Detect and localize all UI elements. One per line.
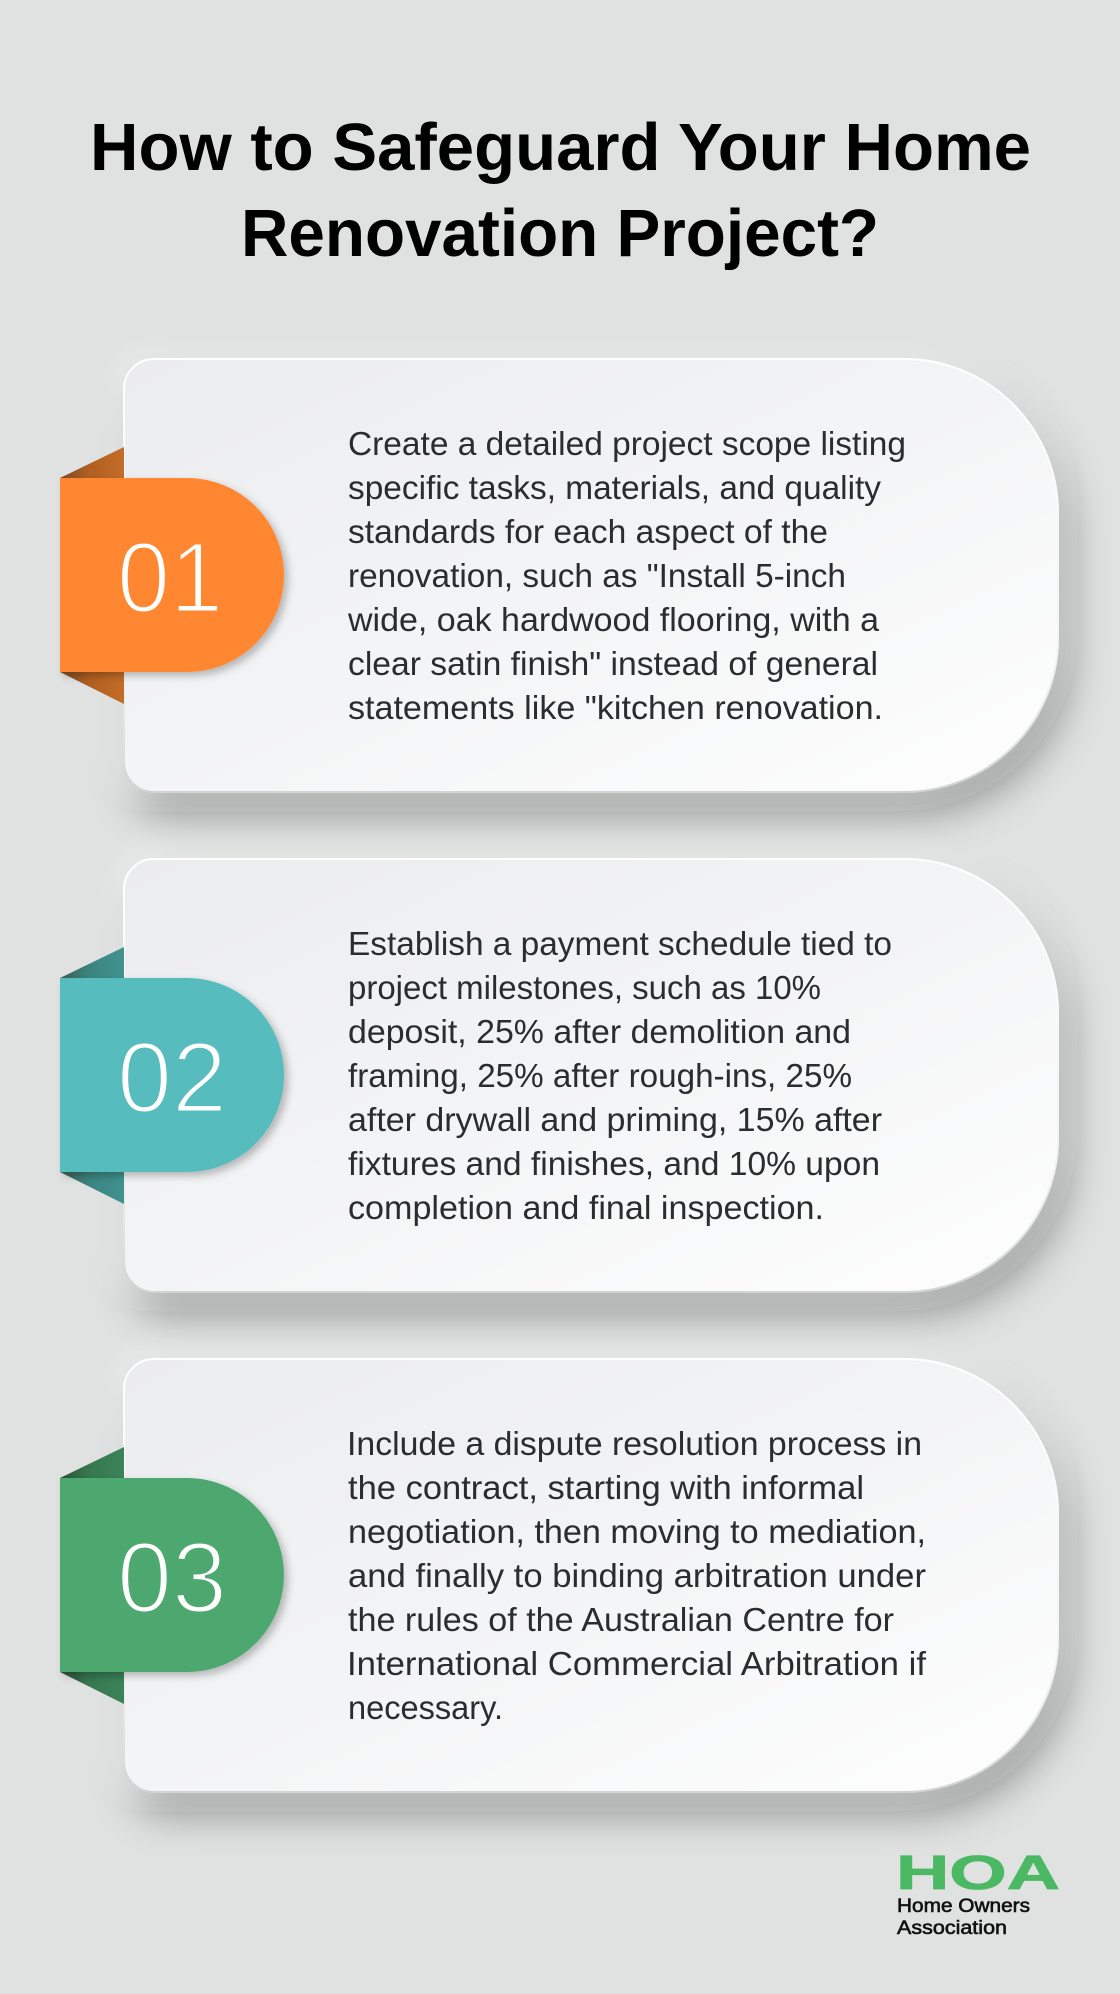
text: step 01: clear satin finish" instead of general bbox=[348, 645, 878, 682]
text: step 01: statements like "kitchen renovation. bbox=[348, 689, 883, 726]
text: step 03: negotiation, then moving to mediation, bbox=[348, 1513, 926, 1550]
title bbox=[90, 110, 1031, 271]
title: Renovation Project? bbox=[241, 196, 879, 271]
text: step 03: the contract, starting with informal bbox=[348, 1469, 864, 1506]
number tab 03 bbox=[60, 1478, 284, 1672]
panel: step 03 bbox=[60, 1359, 1058, 1792]
text: step 02: deposit, 25% after demolition and bbox=[348, 1013, 851, 1050]
logo wordmark: Association bbox=[897, 1918, 1007, 1939]
ribbon fold top 02 bbox=[60, 947, 124, 978]
text: step 03: the rules of the Australian Centre for bbox=[348, 1601, 894, 1638]
number tab 01 bbox=[60, 478, 284, 672]
panel: step 01 bbox=[60, 359, 1058, 792]
text: step 03 bbox=[347, 1425, 927, 1726]
card 01 background bbox=[124, 359, 1058, 792]
ribbon fold top 01 bbox=[60, 447, 124, 478]
number tab 02 bbox=[60, 978, 284, 1172]
text: step 03: Include a dispute resolution process in bbox=[347, 1425, 922, 1462]
text: step 02: fixtures and finishes, and 10% upon bbox=[348, 1145, 880, 1182]
card 02 background bbox=[124, 859, 1058, 1292]
card 03 background bbox=[124, 1359, 1058, 1792]
text: step 03: and finally to binding arbitration under bbox=[348, 1557, 926, 1594]
text: step 02: Establish a payment schedule tied to bbox=[348, 925, 892, 962]
logo mark HOA: HOA bbox=[896, 1847, 1060, 1900]
text: step 02 bbox=[348, 925, 892, 1226]
text: step 01: specific tasks, materials, and quality bbox=[348, 469, 882, 506]
text: step 02: project milestones, such as 10% bbox=[348, 969, 821, 1006]
text: step 01: renovation, such as "Install 5-inch bbox=[348, 557, 846, 594]
text: step 02: after drywall and priming, 15% after bbox=[348, 1101, 882, 1138]
ribbon fold bottom 02 bbox=[60, 1172, 124, 1204]
ribbon fold bottom 03 bbox=[60, 1672, 124, 1704]
ribbon fold bottom 01 bbox=[60, 672, 124, 704]
logo wordmark bbox=[897, 1896, 1030, 1939]
panel: step 02 bbox=[60, 859, 1058, 1292]
text: step 02: framing, 25% after rough-ins, 25% bbox=[348, 1057, 852, 1094]
text: step 03: necessary. bbox=[348, 1689, 503, 1726]
text: step 02: completion and final inspection. bbox=[348, 1189, 824, 1226]
number 02: 02 bbox=[117, 1022, 227, 1134]
text: step 01 bbox=[347, 425, 906, 726]
text: step 01: Create a detailed project scope listing bbox=[348, 425, 906, 462]
logo: Home Owners Association bbox=[896, 1847, 1060, 1939]
logo wordmark: Home Owners bbox=[897, 1896, 1030, 1917]
text: step 01: wide, oak hardwood flooring, with a bbox=[347, 601, 880, 638]
text: step 03: International Commercial Arbitration if bbox=[347, 1645, 927, 1682]
text: step 01: standards for each aspect of the bbox=[348, 513, 828, 550]
number 01: 01 bbox=[117, 522, 223, 634]
number 03: 03 bbox=[117, 1522, 227, 1634]
title: How to Safeguard Your Home bbox=[90, 110, 1031, 185]
ribbon fold top 03 bbox=[60, 1447, 124, 1478]
